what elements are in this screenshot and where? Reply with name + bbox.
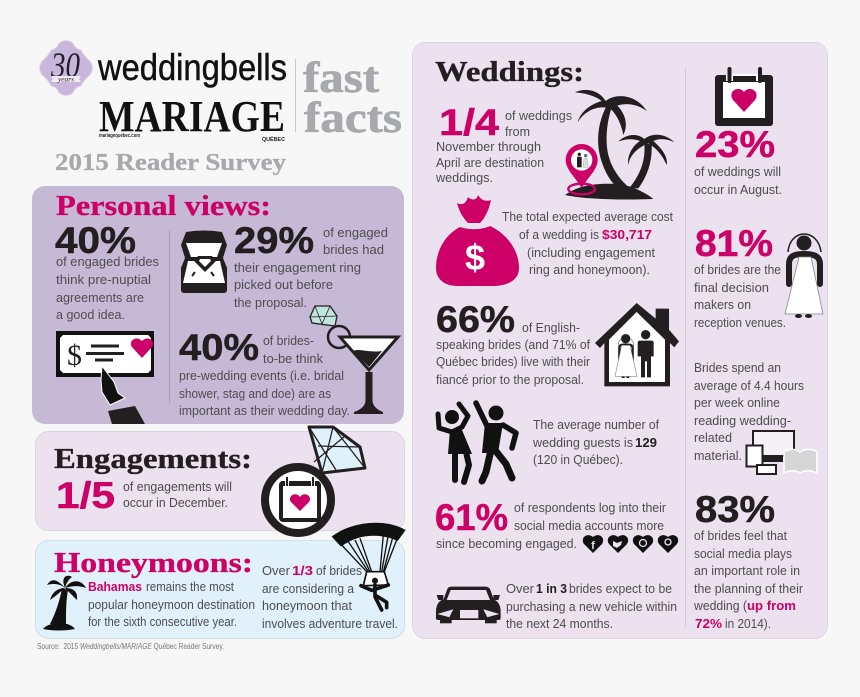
header: logo and title: [40, 40, 402, 176]
stat: 66% live with fiance: of English-: [522, 320, 580, 335]
text: new vehicle: [506, 581, 677, 631]
2015 Reader Survey: 2015 Reader Survey: [55, 150, 286, 176]
stat: 40% pre-wedding events: [179, 327, 350, 418]
text: Bahamas: popular honeymoon destination: [88, 597, 255, 612]
stat: 61% social media: social media accounts more: [514, 518, 664, 533]
text: new vehicle: 1 in 3: [536, 581, 567, 596]
icon: palm trees and location pin: [565, 90, 674, 200]
text: adventure travel: honeymoon that: [262, 598, 352, 613]
stat: 23% August: of weddings will: [694, 164, 781, 179]
text: engagements in December: of engagements will: [123, 479, 232, 494]
stat: 61% social media: since becoming engaged.: [436, 536, 577, 551]
stat: 81% decision makers: of brides are the: [694, 262, 781, 277]
stat: 83% social media role: of brides feel that: [694, 528, 787, 543]
icon: calendar heart: [715, 67, 773, 126]
text: engagements in December: [123, 479, 232, 510]
icon: dancing couple: [438, 403, 516, 482]
stat: 1/4 destination weddings: April are destination: [436, 155, 544, 170]
stat: 61% social media: 61%: [435, 497, 508, 538]
text: hours online: average of 4.4 hours: [694, 378, 804, 393]
text: new vehicle: purchasing a new vehicle within: [506, 599, 677, 614]
stat: 81% decision makers: 81%: [695, 223, 773, 264]
source note: Source: 2015 Weddingbells/MARIAGE Québec Reader Survey.: [37, 642, 224, 651]
text: Bahamas: remains the most: [146, 579, 234, 594]
stat: 1/4 destination weddings: weddings.: [435, 170, 493, 185]
text: wedding guests: wedding guests is: [532, 435, 633, 450]
fast: fast: [303, 55, 380, 102]
stat: 40% pre-wedding events: 40%: [179, 327, 259, 368]
stat: 66% live with fiance: [436, 299, 591, 387]
stat: 1/4 destination weddings: 1/4: [439, 102, 499, 143]
stat: 29% ring picked out: 29%: [234, 220, 314, 261]
stat: 1/4 destination weddings: of weddings: [505, 108, 572, 123]
text: adventure travel: 1/3: [292, 563, 313, 578]
text: wedding guests: [532, 417, 659, 467]
stat: 40% pre-nuptial: a good idea.: [56, 307, 125, 322]
icon: palm on island: [43, 576, 86, 630]
stat: 1/4 destination weddings: [435, 102, 572, 185]
panel: personal views: [32, 186, 404, 424]
stat: 83% social media role: an important role in: [694, 563, 800, 578]
heading: engagements: Engagements:: [54, 443, 252, 475]
icon: social media hearts: f: [591, 540, 595, 552]
icon: 30 years badge: [40, 40, 92, 96]
panel: weddings: [412, 42, 828, 638]
icon: diamond ring with calendar: [265, 427, 365, 533]
stat: 1/5: 1/5: [56, 475, 115, 516]
Quebec small print: QUÉBEC: [262, 135, 285, 143]
text: new vehicle: Over: [506, 581, 535, 596]
stat: 40% pre-wedding events: of brides-: [263, 333, 314, 348]
panel: honeymoons: [36, 523, 406, 638]
heading: weddings: Weddings:: [435, 56, 584, 88]
stat: 23% August: occur in August.: [694, 182, 782, 197]
text: average cost: (including engagement: [527, 245, 655, 260]
stat: 61% social media: of respondents log into their: [514, 500, 667, 515]
text: adventure travel: [262, 563, 398, 631]
text: hours online: related: [694, 430, 732, 445]
stat: 23% August: 23%: [695, 124, 775, 165]
stat: 29% ring picked out: [234, 220, 388, 310]
stat: 40% pre-wedding events: shower, stag and doe) are as: [179, 386, 331, 401]
stat: 29% ring picked out: picked out before: [234, 277, 333, 292]
stat: 1/4 destination weddings: November through: [436, 139, 541, 154]
text: average cost: ring and honeymoon).: [529, 262, 650, 277]
text: Bahamas: [88, 579, 255, 629]
stat: 66% live with fiance: fiancé prior to the proposal.: [436, 372, 584, 387]
icon: money bag: $: [465, 237, 485, 278]
stat: 83% social media role: up from: [747, 598, 796, 613]
text: wedding guests: 129: [635, 435, 657, 450]
icon: house with couple: [595, 303, 679, 386]
MARIAGE wordmark: MARIAGE: [99, 92, 285, 141]
stat: 81% decision makers: reception venues.: [694, 315, 786, 330]
stat: 40% pre-nuptial: agreements are: [56, 290, 144, 305]
stat: 29% ring picked out: their engagement ring: [234, 260, 361, 275]
text: Bahamas: Bahamas: [88, 579, 142, 594]
icon: car: [436, 587, 501, 623]
stat: 83% social media role: 83%: [695, 489, 775, 530]
text: engagements in December: occur in December.: [123, 495, 228, 510]
text: adventure travel: involves adventure travel.: [262, 616, 398, 631]
text: new vehicle: brides expect to be: [569, 581, 672, 596]
heading: personal views: Personal views:: [56, 190, 271, 222]
stat: 40% pre-wedding events: to-be think: [263, 351, 323, 366]
text: hours online: [694, 360, 804, 463]
facts: facts: [304, 95, 402, 142]
text: hours online: per week online: [694, 395, 780, 410]
stat: 40% pre-wedding events: important as their wedding day.: [179, 403, 350, 418]
text: hours online: Brides spend an: [694, 360, 781, 375]
stat: 66% live with fiance: Québec brides) live with their: [436, 354, 591, 369]
text: average cost: The total expected average cost: [502, 209, 673, 224]
website small print: mariagequebec.com: [99, 133, 140, 139]
text: average cost: [502, 209, 673, 277]
stat: 83% social media role: the planning of their: [694, 581, 804, 596]
icon: parachutist: [332, 523, 406, 610]
panel: engagements: [36, 427, 404, 533]
icon: ring box: [181, 230, 227, 293]
text: adventure travel: Over: [262, 563, 291, 578]
heading: honeymoons: Honeymoons:: [54, 547, 253, 579]
stat: 40% pre-nuptial: [55, 220, 159, 322]
stat: 40% pre-nuptial: 40%: [55, 220, 136, 261]
icon: screens and book: [746, 431, 817, 474]
stat: 81% decision makers: final decision: [694, 280, 769, 295]
text: hours online: reading wedding-: [694, 413, 791, 428]
stat: 83% social media role: [693, 489, 804, 631]
text: adventure travel: are considering a: [262, 581, 355, 596]
text: average cost: of a wedding is: [519, 227, 599, 242]
stat: 29% ring picked out: the proposal.: [234, 295, 307, 310]
icon: bride: [785, 234, 823, 318]
icon: social media hearts: [583, 535, 678, 553]
text: Bahamas: for the sixth consecutive year.: [88, 614, 237, 629]
text: adventure travel: of brides: [316, 563, 362, 578]
stat: 83% social media role: in 2014).: [725, 616, 771, 631]
stat: 83% social media role: wedding (: [693, 598, 748, 613]
icon: money bag: [436, 195, 519, 286]
stat: 40% pre-wedding events: pre-wedding events (i.e. bridal: [179, 368, 344, 383]
icon: cheque and pen: $: [67, 339, 82, 372]
stat: 1/4 destination weddings: from: [505, 124, 530, 139]
icon: 30 years badge: years: [57, 76, 74, 84]
icon: martini with ring: [310, 306, 398, 414]
stat: 66% live with fiance: 66%: [436, 299, 515, 340]
text: average cost: $30,717: [602, 227, 652, 242]
stat: 40% pre-nuptial: think pre-nuptial: [56, 272, 151, 287]
text: hours online: material.: [694, 448, 742, 463]
stat: 81% decision makers: [694, 223, 786, 330]
stat: 66% live with fiance: speaking brides (and 71% of: [436, 337, 590, 352]
stat: 83% social media role: social media plays: [694, 546, 792, 561]
stat: 29% ring picked out: of engaged: [323, 225, 388, 240]
stat: 61% social media: [435, 497, 667, 551]
text: new vehicle: the next 24 months.: [506, 616, 613, 631]
icon: cheque and pen: [56, 331, 154, 424]
stat: 83% social media role: 72%: [695, 616, 722, 631]
stat: 23% August: [694, 124, 782, 197]
text: wedding guests: The average number of: [533, 417, 659, 432]
stat: 40% pre-nuptial: of engaged brides: [56, 254, 159, 269]
weddingbells wordmark: weddingbells: [97, 47, 287, 88]
text: wedding guests: (120 in Québec).: [533, 452, 623, 467]
stat: 29% ring picked out: brides had: [323, 242, 384, 257]
icon: 30 years badge: 30: [50, 45, 80, 85]
stat: 81% decision makers: makers on: [694, 297, 751, 312]
